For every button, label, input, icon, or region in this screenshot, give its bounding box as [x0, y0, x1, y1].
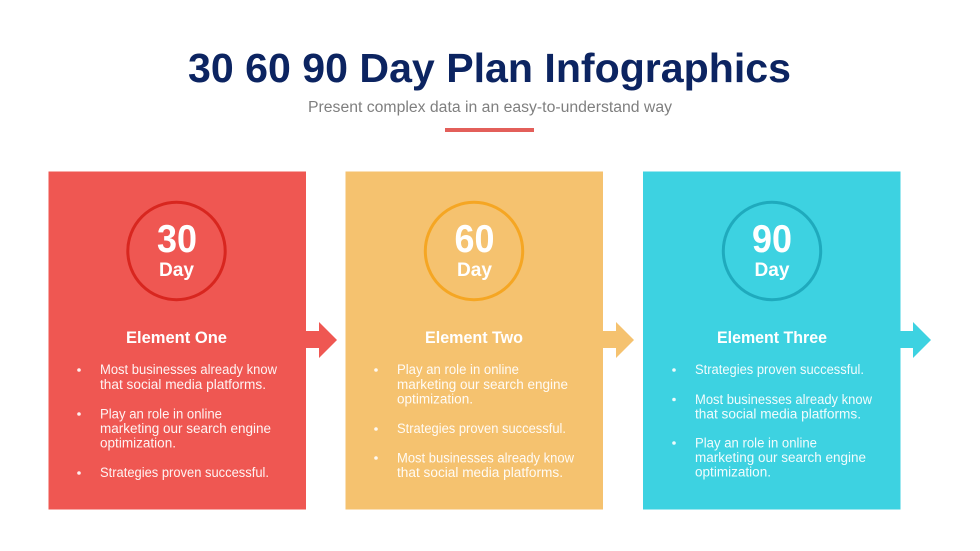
- heading: Element One: [126, 329, 227, 347]
- day badge: Day: [457, 260, 492, 281]
- bullet list: that social media platforms.: [695, 406, 861, 422]
- day badge: 30: [157, 218, 197, 261]
- bullet list: [77, 362, 277, 480]
- bullet list: optimization.: [397, 392, 473, 406]
- title underline: [445, 128, 534, 132]
- bullet list: [374, 362, 574, 480]
- bullet list: [672, 362, 872, 480]
- bullet list: Play an role in online: [397, 362, 519, 377]
- bullet list: that social media platforms.: [100, 377, 266, 392]
- bullet list: Most businesses already know: [695, 392, 872, 407]
- arrow: to next panel: [900, 322, 931, 358]
- bullet list: Most businesses already know: [100, 362, 277, 377]
- day badge: [425, 202, 523, 300]
- day badge: [128, 202, 225, 300]
- bullet list: Strategies proven successful.: [397, 421, 566, 436]
- bullet list: Strategies proven successful.: [100, 465, 269, 480]
- day badge: Day: [754, 260, 790, 281]
- bullet list: optimization.: [695, 464, 771, 480]
- heading: Element Two: [425, 329, 523, 347]
- bullet list: marketing our search engine: [397, 377, 568, 392]
- panel: 30 day: [48, 172, 337, 510]
- card background: [643, 172, 900, 510]
- bullet list: that social media platforms.: [397, 465, 563, 480]
- subtitle: Present complex data in an easy-to-understand way: [308, 99, 672, 116]
- day badge: 90: [752, 218, 792, 261]
- bullet list: Strategies proven successful.: [695, 362, 864, 377]
- day badge: [723, 202, 821, 300]
- bullet list: marketing our search engine: [695, 450, 866, 465]
- bullet list: Play an role in online: [695, 436, 817, 450]
- title: 30 60 90 Day Plan Infographics: [188, 45, 791, 91]
- bullet list: marketing our search engine: [100, 421, 271, 436]
- heading: Element Three: [717, 329, 827, 347]
- arrow: to next panel: [603, 322, 634, 358]
- bullet list: Play an role in online: [100, 406, 222, 422]
- day badge: Day: [159, 260, 194, 281]
- day badge: 60: [454, 218, 494, 261]
- bullet list: Most businesses already know: [397, 450, 574, 466]
- panel: 60 day: [346, 172, 634, 510]
- bullet list: optimization.: [100, 436, 176, 450]
- card background: [346, 172, 603, 510]
- panel: 90 day: [643, 172, 931, 510]
- card background: [48, 172, 306, 510]
- arrow: to next panel: [306, 322, 337, 358]
